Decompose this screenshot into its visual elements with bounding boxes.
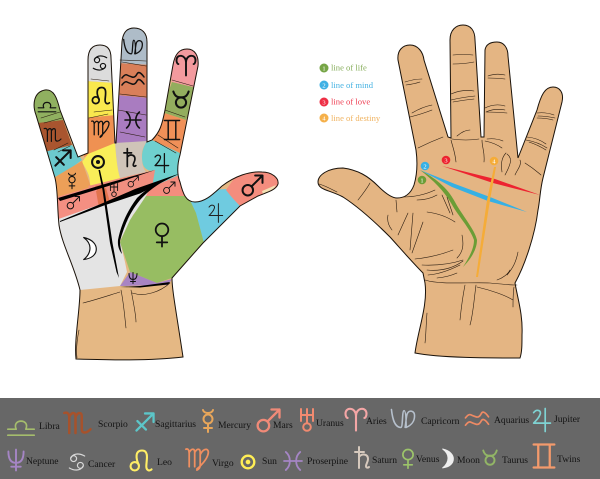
legend: aries (346, 409, 387, 431)
legend: sagittarius: Sagittarius (155, 419, 196, 430)
symbol: aquarius (122, 73, 144, 85)
legend: leo (131, 450, 172, 470)
symbol: virgo (92, 121, 109, 137)
legend: virgo (186, 449, 234, 470)
legend: twins: Twins (557, 454, 581, 465)
creases (388, 54, 555, 343)
symbol: mars on jupiter mound (164, 182, 175, 193)
symbol: venus (156, 224, 168, 247)
legend: cancer (69, 454, 116, 470)
marker 4: 4 (492, 158, 496, 165)
legend: mars (258, 410, 293, 431)
line legend (320, 62, 381, 123)
marker 1 (418, 176, 426, 184)
legend: aquarius (465, 412, 529, 426)
hand shape (318, 25, 563, 358)
legend: mercury (203, 410, 251, 432)
legend item: line of destiny: line of destiny (331, 113, 381, 123)
symbol: capricorn (124, 39, 142, 54)
legend: taurus (483, 450, 528, 466)
legend: sun (242, 456, 277, 468)
legend: twins (534, 444, 581, 468)
symbol: moon (84, 238, 96, 260)
legend: sagittarius (136, 413, 196, 431)
marker 4 (490, 157, 498, 165)
symbol: neptune (129, 272, 137, 284)
legend: jupiter: Jupiter (554, 414, 581, 425)
marker 3 (442, 156, 450, 164)
line of love (442, 166, 540, 195)
symbol: jupiter on thumb (209, 204, 223, 222)
symbol: leo (92, 88, 109, 104)
finger creases (41, 60, 193, 153)
legend: moon: Moon (457, 455, 480, 466)
legend: neptune: Neptune (26, 456, 59, 467)
symbol: saturn (124, 149, 136, 166)
symbol: jupiter (155, 154, 169, 172)
legend: proserpine: Proserpine (307, 456, 348, 467)
symbol: scorpio (44, 128, 61, 141)
legend: libra: Libra (39, 421, 61, 432)
legend: moon (443, 449, 480, 468)
legend: sun: Sun (262, 456, 277, 467)
marker 2: 2 (423, 163, 427, 170)
legend: taurus: Taurus (502, 455, 528, 466)
legend: scorpio (64, 413, 128, 433)
marker 2 (421, 162, 429, 170)
legend item: line of love: line of love (331, 96, 370, 106)
legend: proserpine (284, 452, 348, 470)
line of destiny (476, 167, 496, 277)
zodiac and planet legend band (0, 398, 600, 479)
legend: libra (8, 421, 61, 435)
legend: neptune (8, 450, 59, 470)
symbol: mars on palm edge (67, 196, 80, 209)
legend: mercury: Mercury (218, 420, 251, 431)
symbol: mercury (68, 173, 76, 189)
legend: mars: Mars (273, 420, 293, 431)
legend: saturn: Saturn (372, 455, 397, 466)
line of mind (420, 170, 527, 212)
symbol: libra (38, 102, 56, 112)
legend item: line of love: 3 (322, 99, 326, 106)
legend: aquarius: Aquarius (494, 415, 529, 426)
thumb nail (319, 183, 370, 200)
left hand: zodiac palm map (30, 20, 290, 365)
symbol: sun (92, 156, 104, 168)
legend: uranus: Uranus (316, 418, 344, 429)
palm regions (34, 28, 278, 360)
legend item: line of life: 1 (322, 65, 326, 72)
legend: leo: Leo (157, 457, 172, 468)
line of life (420, 170, 477, 267)
hand outline (34, 28, 278, 360)
marker 3: 3 (444, 157, 448, 164)
symbol: twins (164, 120, 180, 140)
legend item: line of life: line of life (331, 62, 367, 72)
legend: aries: Aries (366, 416, 387, 427)
symbol: mars on saturn mound (128, 176, 138, 187)
marker 1: 1 (420, 177, 424, 184)
symbol: mars on thumb (243, 176, 262, 195)
legend item: line of mind: 2 (322, 82, 326, 89)
symbol: taurus (173, 92, 189, 108)
legend: scorpio: Scorpio (98, 419, 128, 430)
legend: capricorn (391, 410, 460, 427)
right hand: palm lines (318, 25, 563, 358)
symbol: cancer (93, 56, 107, 70)
legend item: line of mind: line of mind (331, 80, 374, 90)
legend: venus (403, 450, 440, 468)
symbol: sagittarius (55, 150, 71, 166)
legend: venus: Venus (416, 454, 440, 465)
legend item: line of destiny: 4 (322, 115, 326, 122)
symbol: aries (176, 56, 196, 75)
hand symbols (38, 39, 263, 283)
legend: saturn (355, 447, 397, 468)
legend: uranus (301, 409, 344, 431)
wrist creases (77, 283, 170, 358)
legend: virgo: Virgo (212, 458, 234, 469)
palm lines (58, 170, 179, 288)
legend: cancer: Cancer (88, 459, 116, 470)
legend: capricorn: Capricorn (421, 416, 460, 427)
legend: jupiter (534, 408, 581, 432)
symbol: proserpine (125, 112, 141, 128)
symbol: uranus (110, 183, 118, 196)
